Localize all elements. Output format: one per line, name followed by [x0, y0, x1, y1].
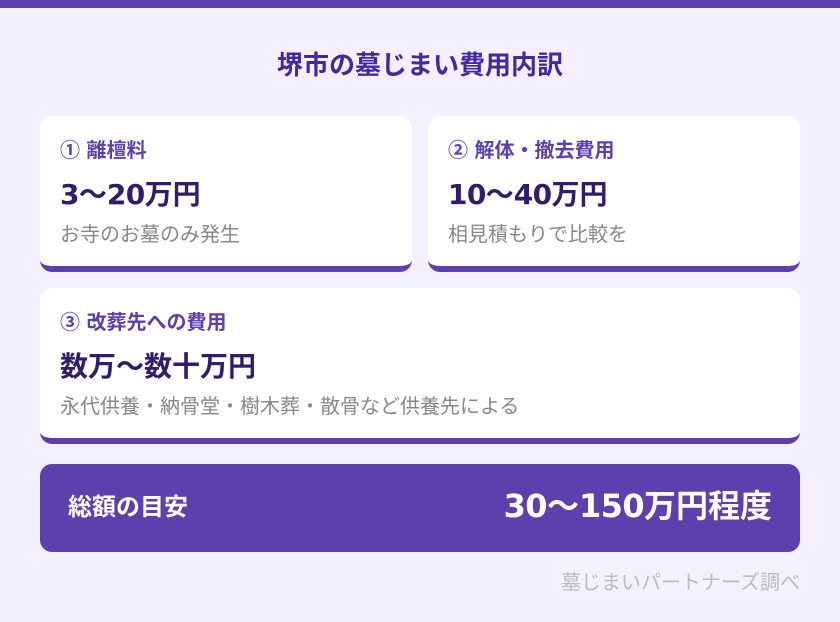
note: 供養先による: 永代供養・納骨堂・樹木葬・散骨など供養先による — [60, 390, 519, 419]
note: お寺のお墓のみ発生: お寺のお墓のみ発生 — [60, 218, 240, 247]
label: 離檀料: ① 離檀料 — [60, 134, 147, 163]
note: 相見積もりで比較を: 相見積もりで比較を — [448, 218, 628, 247]
label: 改葬先への費用: ③ 改葬先への費用 — [60, 306, 227, 335]
value: 3〜20万円: 3〜20万円 — [60, 173, 201, 213]
label: 解体・撤去費用: ② 解体・撤去費用 — [448, 134, 615, 163]
value: 10〜40万円: 10〜40万円 — [448, 173, 608, 213]
panel: 解体・撤去費用 — [428, 116, 800, 272]
value: 数万〜数十万円: 数万〜数十万円 — [60, 345, 256, 385]
top accent bar — [0, 0, 840, 8]
panel: 改葬先への費用 — [40, 288, 800, 444]
title: 堺市の墓じまい費用内訳 — [277, 45, 563, 82]
total value: 30〜150万円程度 — [504, 481, 772, 527]
panel: 離檀料 — [40, 116, 412, 272]
panel: total estimate — [40, 464, 800, 552]
total label: 総額の目安 — [68, 487, 188, 522]
source note: 墓じまいパートナーズ調べ — [561, 566, 800, 595]
